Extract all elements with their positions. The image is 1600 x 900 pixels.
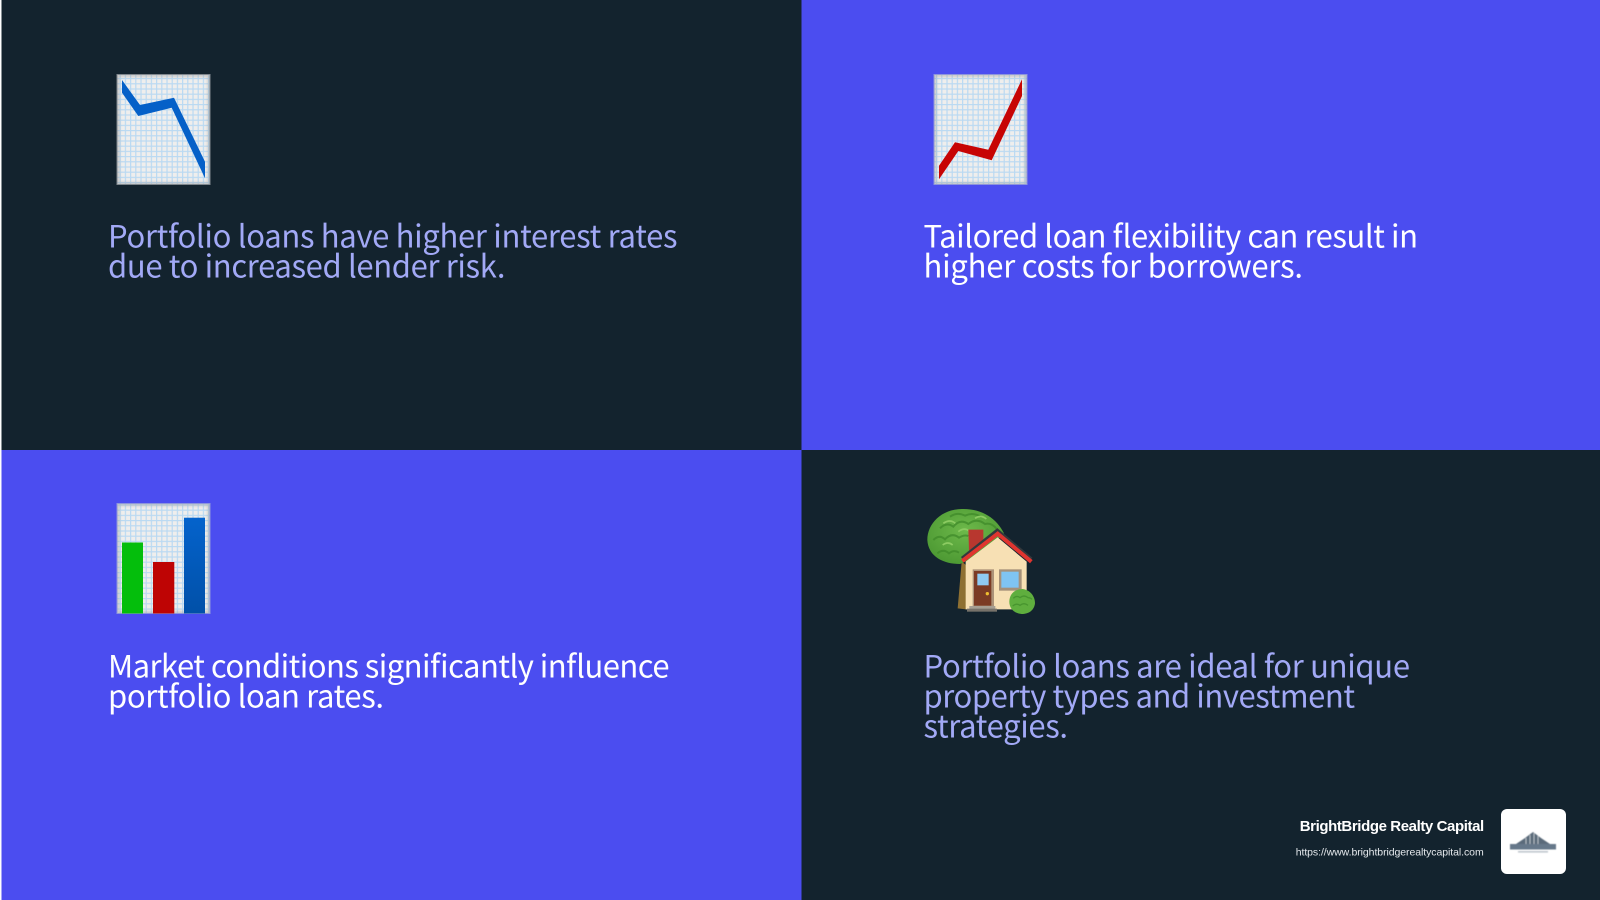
text: interest rates statement: due to increased lender risk.	[108, 242, 506, 286]
panel: market conditions	[2, 450, 802, 900]
logo tile	[1501, 809, 1566, 874]
text: property types statement: Portfolio loans are ideal for unique	[924, 642, 1410, 686]
text: flexibility statement: Tailored loan flexibility can result in	[924, 212, 1418, 256]
panel: higher interest rates	[2, 0, 802, 450]
icon: house with tree	[927, 509, 1035, 614]
text: property types statement: property types and investment	[924, 672, 1355, 716]
icon: chart increasing	[934, 74, 1027, 184]
panel: loan flexibility	[802, 0, 1600, 450]
text: property types statement: strategies.	[924, 702, 1068, 746]
company url: https://www.brightbridgerealtycapital.com	[1296, 846, 1484, 858]
text: flexibility statement: higher costs for borrowers.	[924, 242, 1303, 286]
icon: chart decreasing	[117, 74, 210, 184]
text: interest rates statement: Portfolio loans have higher interest rates	[108, 212, 678, 256]
text: market statement: Market conditions significantly influence	[108, 642, 670, 686]
text: interest rates statement	[108, 212, 678, 286]
footer: company branding	[1296, 809, 1566, 874]
panel: unique property types	[802, 450, 1600, 900]
text: market statement	[108, 642, 670, 716]
icon: bar chart	[117, 504, 210, 614]
text: market statement: portfolio loan rates.	[108, 672, 384, 716]
text: flexibility statement	[924, 212, 1418, 286]
company name: BrightBridge Realty Capital	[1300, 818, 1484, 835]
text: property types statement	[924, 642, 1410, 746]
